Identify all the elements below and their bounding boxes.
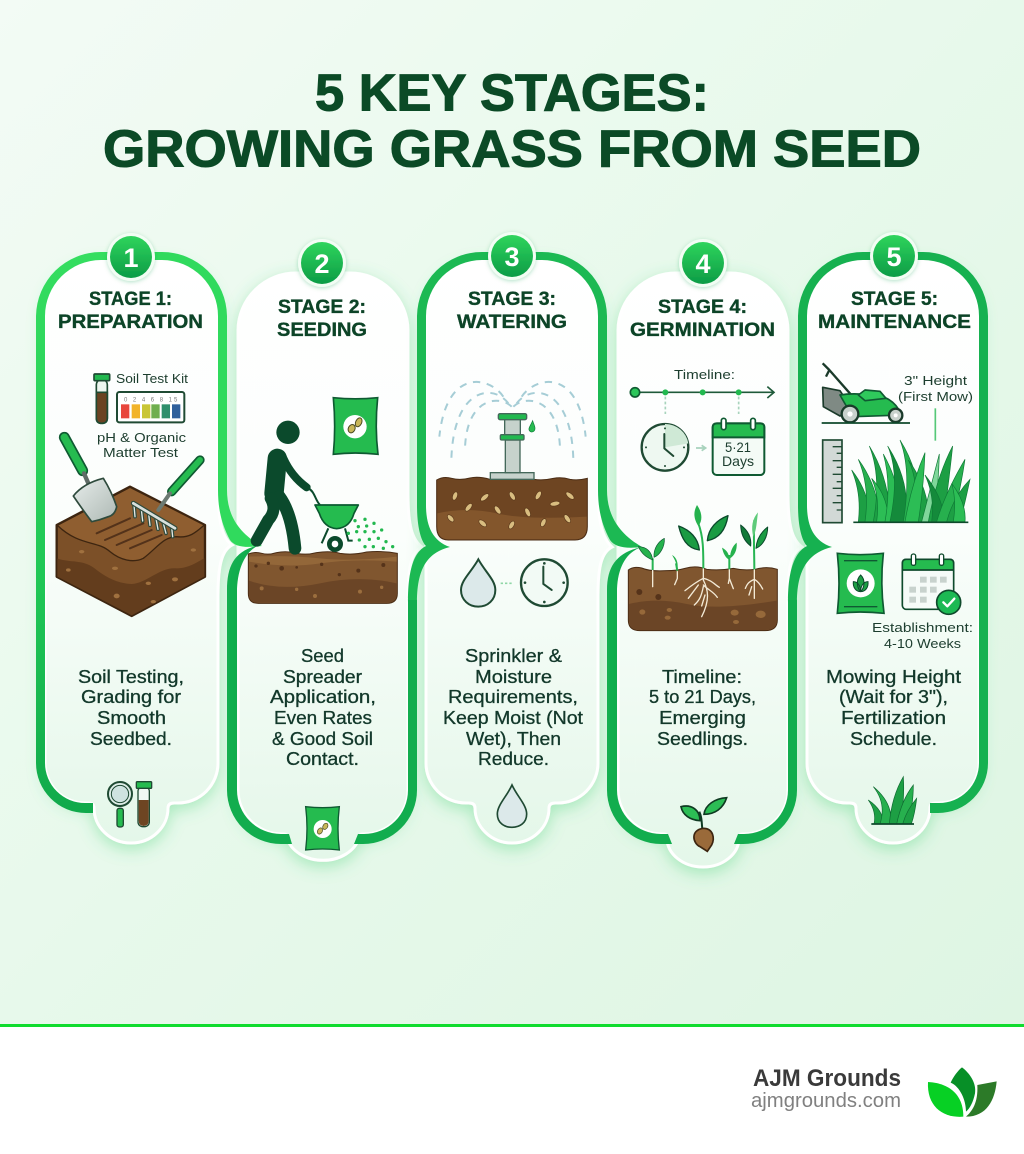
icon: soil with seeds bbox=[437, 477, 587, 540]
text: stage 1 description bbox=[78, 667, 184, 749]
panel 4 green frame bbox=[607, 547, 672, 844]
panel 1 green frame bbox=[36, 252, 112, 813]
panel 2 green frame bbox=[227, 545, 292, 844]
footer accent line bbox=[0, 1024, 1024, 1027]
icon: pH colour card bbox=[117, 392, 184, 422]
heading stage 2: STAGE 2: bbox=[278, 297, 366, 318]
text: stage 1 description: Smooth bbox=[97, 708, 166, 728]
icon: rake bbox=[133, 460, 200, 537]
heading stage 2 bbox=[277, 297, 367, 341]
illustration: mower, ruler and tall grass bbox=[822, 363, 970, 614]
text: stage 2 description bbox=[270, 646, 376, 769]
heading stage 1 bbox=[58, 289, 203, 333]
panel 4 right band lower bbox=[734, 600, 797, 844]
text: stage 1 description: Soil Testing, bbox=[78, 667, 184, 687]
brand text: ajmgrounds.com bbox=[751, 1090, 901, 1112]
illustration: timeline, clock and calendar bbox=[630, 387, 774, 475]
panel: stage 4 germination bbox=[607, 273, 802, 867]
illustration: sprinkler over seeded soil bbox=[437, 382, 587, 607]
panel: stage 3 watering bbox=[408, 252, 642, 843]
panel 2 card bbox=[238, 273, 422, 860]
text: stage 1 description: Grading for bbox=[81, 687, 181, 707]
text: stage 4 description bbox=[649, 667, 756, 749]
text: stage 2 description: Application, bbox=[270, 687, 376, 707]
icon: seed spreader bbox=[308, 488, 394, 552]
icon: test tube bbox=[94, 374, 110, 423]
panel 3 card bbox=[426, 260, 612, 843]
text: stage 2 description: Even Rates bbox=[274, 708, 372, 728]
icon: clock bbox=[642, 424, 688, 471]
text: stage 3 description: Requirements, bbox=[448, 687, 578, 707]
text: timeline label: Timeline: bbox=[674, 367, 735, 382]
heading stage 3: WATERING bbox=[457, 312, 567, 333]
icon: soil bbox=[628, 567, 777, 631]
text: establishment label: Establishment: bbox=[872, 620, 973, 635]
icon: soil strip bbox=[248, 552, 397, 603]
text: stage 5 description: (Wait for 3"), bbox=[839, 687, 948, 707]
heading stage 2: SEEDING bbox=[277, 320, 367, 341]
illustration: soil test kit and tools on soil block bbox=[57, 374, 205, 616]
icon: pH colour card: 0 2 4 6 8 15 bbox=[124, 397, 178, 403]
icon: water spray arcs bbox=[439, 382, 586, 460]
number badge 3: 3 bbox=[504, 242, 520, 272]
text: stage 3 description: Moisture bbox=[475, 667, 552, 687]
label: 5-21 days: Days bbox=[722, 453, 754, 469]
label: 5-21 days: 5·21 bbox=[725, 439, 751, 455]
icon: roots bbox=[653, 568, 763, 617]
panel 3 green frame bbox=[408, 252, 493, 602]
panel 5 green frame bbox=[788, 252, 874, 602]
title: 5 KEY STAGES: bbox=[315, 64, 709, 122]
panel 5 card bbox=[807, 260, 979, 843]
brand text: AJM Grounds bbox=[753, 1065, 901, 1092]
text: first mow height label bbox=[898, 373, 973, 404]
text: stage 4 description: 5 to 21 Days, bbox=[649, 687, 756, 707]
icon: water drop bbox=[461, 559, 495, 607]
text: stage 1 description: Seedbed. bbox=[90, 729, 172, 749]
heading stage 3: STAGE 3: bbox=[468, 289, 556, 310]
text: soil test kit label: Soil Test Kit bbox=[116, 371, 188, 386]
text: pH and organic matter test label: pH & Organic bbox=[97, 430, 187, 445]
text: stage 2 description: Contact. bbox=[286, 749, 359, 769]
text: stage 5 description bbox=[826, 667, 961, 749]
illustration: person with seed spreader on soil bbox=[248, 398, 397, 603]
arrow: clock to calendar bbox=[696, 445, 706, 451]
icon: trowel bbox=[64, 437, 117, 522]
icon: calendar with check bbox=[902, 554, 961, 614]
number badge 5: 5 bbox=[886, 242, 902, 272]
illustration: seedlings with roots in soil bbox=[628, 505, 777, 631]
text: stage 3 description: Wet), Then bbox=[466, 729, 561, 749]
icon: fertilizer bag bbox=[837, 553, 884, 613]
icon: calendar bbox=[713, 418, 764, 475]
icon: stems and leaves bbox=[638, 505, 768, 571]
panel: stage 5 maintenance bbox=[788, 252, 988, 843]
brand text bbox=[751, 1065, 901, 1112]
heading stage 1: STAGE 1: bbox=[89, 289, 172, 310]
heading stage 1: PREPARATION bbox=[58, 312, 203, 333]
number badge 1 bbox=[107, 233, 155, 281]
panel 1 card bbox=[45, 260, 232, 843]
icon: green water drop bbox=[529, 421, 535, 432]
label: 5-21 days bbox=[722, 439, 754, 469]
number badge 4: 4 bbox=[695, 249, 711, 279]
number badge 2 bbox=[298, 239, 346, 287]
logo: leaves bbox=[928, 1067, 997, 1117]
icon: tall grass bbox=[852, 440, 970, 522]
icon: seed bag bbox=[333, 398, 378, 454]
text: stage 5 description: Fertilization bbox=[841, 708, 946, 728]
icon: sprouting seed bbox=[681, 798, 727, 851]
text: stage 4 description: Seedlings. bbox=[657, 729, 748, 749]
heading stage 3 bbox=[457, 289, 567, 333]
title bbox=[103, 64, 921, 178]
number badge 3 bbox=[488, 232, 536, 280]
heading stage 5: MAINTENANCE bbox=[818, 312, 971, 333]
icon: ruler bbox=[823, 440, 842, 523]
icon: clock bbox=[521, 559, 568, 606]
icon: height pointer line bbox=[933, 408, 938, 441]
text: stage 5 description: Mowing Height bbox=[826, 667, 961, 687]
icon: small seed bag bbox=[306, 807, 339, 850]
footer band bbox=[0, 1027, 1024, 1154]
arrow: drop to clock bbox=[501, 581, 513, 586]
text: pH and organic matter test label bbox=[97, 430, 187, 460]
panel: stage 2 seeding bbox=[227, 273, 422, 860]
heading stage 4 bbox=[630, 297, 775, 341]
icon: lawn mower bbox=[822, 363, 910, 423]
text: stage 3 description bbox=[443, 646, 583, 769]
text: stage 3 description: Sprinkler & bbox=[465, 646, 562, 666]
icon: small grass tuft bbox=[868, 777, 917, 824]
text: establishment label bbox=[872, 620, 973, 651]
text: stage 2 description: Spreader bbox=[283, 667, 362, 687]
number badge 4 bbox=[679, 239, 727, 287]
text: stage 2 description: Seed bbox=[301, 646, 344, 666]
panel 4 card bbox=[618, 273, 802, 867]
text: first mow height label: 3" Height bbox=[904, 373, 967, 388]
heading stage 5 bbox=[818, 289, 971, 333]
icon: soil block bbox=[57, 487, 205, 616]
text: establishment label: 4-10 Weeks bbox=[884, 636, 962, 651]
icon: small water drop bbox=[497, 785, 527, 827]
title: GROWING GRASS FROM SEED bbox=[103, 120, 921, 178]
icon: timeline arrow bbox=[630, 387, 774, 414]
panel 2 right band lower bbox=[354, 600, 417, 844]
text: stage 3 description: Reduce. bbox=[478, 749, 549, 769]
text: stage 4 description: Emerging bbox=[659, 708, 746, 728]
number badge 2: 2 bbox=[314, 249, 330, 279]
icon: sprinkler head bbox=[490, 414, 534, 479]
text: stage 2 description: & Good Soil bbox=[272, 729, 373, 749]
number badge 5 bbox=[870, 232, 918, 280]
text: stage 3 description: Keep Moist (Not bbox=[443, 708, 583, 728]
text: pH and organic matter test label: Matter Test bbox=[103, 445, 178, 460]
panel: stage 1 preparation bbox=[36, 252, 262, 843]
heading stage 5: STAGE 5: bbox=[851, 289, 938, 310]
icon: magnifier and test tube bbox=[108, 782, 152, 827]
number badge 1: 1 bbox=[123, 243, 139, 273]
heading stage 4: GERMINATION bbox=[630, 320, 775, 341]
text: stage 4 description: Timeline: bbox=[662, 667, 742, 687]
text: first mow height label: (First Mow) bbox=[898, 389, 973, 404]
text: stage 5 description: Schedule. bbox=[850, 729, 937, 749]
heading stage 4: STAGE 4: bbox=[658, 297, 747, 318]
icon: person walking bbox=[257, 421, 307, 548]
